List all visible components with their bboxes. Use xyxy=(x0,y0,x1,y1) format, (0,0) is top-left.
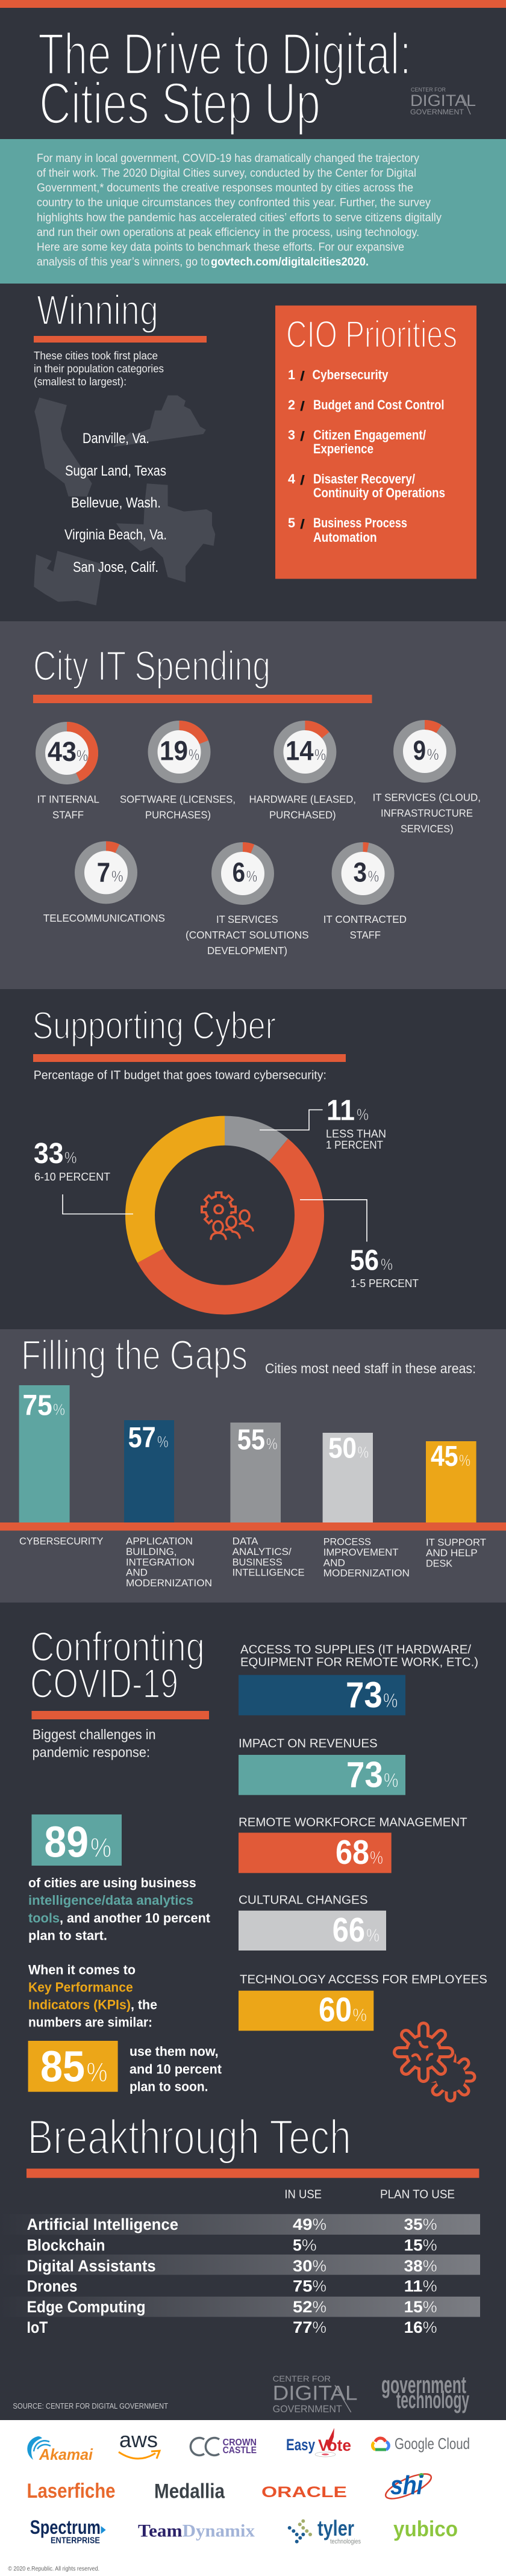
donut: 3 percent IT contracted staff: 3 xyxy=(353,857,367,887)
priorities list: Automation xyxy=(313,530,377,545)
logo: Tyler Technologies xyxy=(288,2516,361,2545)
donut: 3 percent IT contracted staff: IT CONTRACTED xyxy=(323,913,407,925)
label: 11 percent: LESS THAN xyxy=(326,1128,386,1140)
logo: Spectrum Enterprise: Spectrum xyxy=(30,2516,101,2538)
heading: Filling the Gaps: Filling the Gaps xyxy=(21,1332,248,1379)
donut: 9 percent IT services cloud: % xyxy=(427,745,439,763)
logo: Crown Castle xyxy=(190,2438,257,2456)
bar: process improvement 50 percent: AND xyxy=(323,1557,345,1568)
bar: process improvement 50 percent: IMPROVEMENT xyxy=(323,1547,399,1558)
intro paragraph: highlights how the pandemic has accelerated cities’ efforts to serve citizens digitally xyxy=(37,211,442,224)
label: 33 percent xyxy=(34,1138,110,1183)
bar: cybersecurity 75 percent: CYBERSECURITY xyxy=(19,1536,103,1547)
bar: IT support 45 percent: DESK xyxy=(426,1557,453,1569)
logo: SHI: shi xyxy=(390,2471,423,2500)
winning cities list: San Jose, Calif. xyxy=(73,559,158,576)
bar: remote workforce management 68 percent: 68 xyxy=(336,1833,369,1872)
donut: 6 percent IT services contract: % xyxy=(246,867,257,885)
row: Artificial Intelligence: % xyxy=(312,2215,326,2233)
logo: Crown Castle: CASTLE xyxy=(223,2445,257,2456)
row: Digital Assistants xyxy=(0,2255,480,2275)
donut: 14 percent hardware: HARDWARE (LEASED, xyxy=(249,793,356,805)
bar: application building 57 percent: BUILDING, xyxy=(126,1546,177,1557)
bar: remote workforce management 68 percent: REMOTE WORKFORCE MANAGEMENT xyxy=(239,1816,467,1829)
winning cities list: Danville, Va. xyxy=(83,430,149,447)
icon: virus xyxy=(392,2021,470,2097)
logo: Laserfiche: Laserfiche xyxy=(27,2480,116,2503)
donut: 14 percent hardware xyxy=(249,725,356,821)
bar: application building 57 percent: % xyxy=(157,1433,169,1451)
row: Edge Computing: 52 xyxy=(293,2298,312,2316)
bar: cultural changes 66 percent: % xyxy=(366,1925,380,1946)
heading: Confronting COVID-19: Confronting xyxy=(30,1624,205,1670)
donut: 6 percent IT services contract xyxy=(186,847,309,957)
bar: process improvement 50 percent xyxy=(323,1433,410,1579)
row: Artificial Intelligence: 49 xyxy=(293,2215,312,2233)
winning intro text xyxy=(34,350,164,388)
label: 56 percent: 1-5 PERCENT xyxy=(351,1277,419,1290)
donut: 9 percent IT services cloud: INFRASTRUCTURE xyxy=(381,807,473,819)
bar: data analytics 55 percent: BUSINESS xyxy=(233,1556,283,1568)
title: Cities Step Up xyxy=(39,70,320,136)
priorities list: / xyxy=(300,368,305,383)
label: 33 percent: 6-10 PERCENT xyxy=(34,1171,110,1183)
logo: EasyVote xyxy=(286,2428,351,2457)
bar: process improvement 50 percent: MODERNIZATION xyxy=(323,1568,410,1579)
label: 56 percent xyxy=(350,1245,419,1290)
bar: IT support 45 percent xyxy=(426,1441,486,1569)
priorities list: 1 xyxy=(288,367,295,382)
row: Edge Computing: 15 xyxy=(404,2298,423,2316)
stat box: 85 percent xyxy=(28,2041,118,2092)
row: IoT: 77 xyxy=(293,2318,312,2336)
logo: EasyVote: Vote xyxy=(318,2436,351,2454)
row: Blockchain: % xyxy=(423,2236,437,2255)
bar: technology access 60 percent: TECHNOLOGY ACCESS FOR EMPLOYEES xyxy=(240,1973,487,1986)
bar: data analytics 55 percent xyxy=(230,1423,305,1578)
bar: data analytics 55 percent: DATA xyxy=(233,1536,258,1547)
logo: SHI xyxy=(383,2469,434,2504)
priorities list: Experience xyxy=(313,441,373,456)
donut: 7 percent telecommunications: TELECOMMUNICATIONS xyxy=(43,912,165,924)
bar: impact on revenues 73 percent: % xyxy=(384,1769,398,1791)
subheading: Cities most need staff in these areas: xyxy=(265,1361,476,1376)
stat box: 85 percent: 85 xyxy=(40,2043,85,2091)
intro paragraph: of their work. The 2020 Digital Cities survey, conducted by the Center for Digital xyxy=(37,167,416,179)
donut: 14 percent hardware: % xyxy=(314,746,326,764)
priorities list: / xyxy=(300,429,305,444)
bar: application building 57 percent: INTEGRATION xyxy=(126,1556,195,1568)
stat box: 89 percent xyxy=(31,1814,122,1866)
text: KPIs: Indicators (KPIs) xyxy=(28,1997,131,2012)
text: use them now: use them now, xyxy=(130,2044,219,2059)
intro paragraph: govtech.com/digitalcities2020. xyxy=(211,256,369,268)
bar: remote workforce management 68 percent xyxy=(239,1816,467,1873)
logo: Akamai: Akamai xyxy=(39,2445,93,2463)
donut: 43 percent IT internal staff: STAFF xyxy=(52,809,84,821)
bar: IT support 45 percent: % xyxy=(459,1451,470,1470)
winning intro text: (smallest to largest): xyxy=(34,376,126,388)
intro paragraph xyxy=(37,152,442,268)
donut: 9 percent IT services cloud: 9 xyxy=(413,735,426,766)
row: Artificial Intelligence: 35 xyxy=(404,2215,423,2233)
logo: TeamDynamix: Team xyxy=(138,2521,183,2541)
subheading: Percentage of IT budget that goes toward cybersecurity: xyxy=(34,1069,326,1082)
donut: 6 percent IT services contract: IT SERVICES xyxy=(216,913,278,925)
text: KPIs: , the xyxy=(131,1997,157,2012)
text: KPIs xyxy=(28,1962,157,2030)
text: business intelligence: , and another 10 percent xyxy=(60,1910,211,1925)
bar: data analytics 55 percent: 55 xyxy=(237,1424,265,1456)
logo: Tyler Technologies: tyler xyxy=(317,2516,354,2540)
bar: IT support 45 percent: IT SUPPORT xyxy=(426,1537,486,1548)
donut: 6 percent IT services contract: 6 xyxy=(233,857,245,887)
donut: 14 percent hardware: 14 xyxy=(286,736,314,766)
intro paragraph: analysis of this year’s winners, go to xyxy=(37,256,210,268)
stat box: 89 percent: 89 xyxy=(44,1818,89,1866)
donut: 3 percent IT contracted staff: % xyxy=(368,867,379,885)
logo: Center for Digital Government: CENTER FOR xyxy=(411,87,446,93)
row: Blockchain xyxy=(27,2236,437,2255)
priorities list: Disaster Recovery/ xyxy=(313,471,415,486)
logo: Center for Digital Government footer: CENTER FOR xyxy=(273,2374,331,2383)
bar: application building 57 percent: APPLICATION xyxy=(126,1536,193,1547)
donut: 6 percent IT services contract: DEVELOPMENT) xyxy=(207,945,287,957)
winning cities list: Bellevue, Wash. xyxy=(71,495,161,511)
subheading: Biggest challenges in xyxy=(33,1727,156,1742)
donut: 6 percent IT services contract: (CONTRACT SOLUTIONS xyxy=(186,929,309,941)
logo: Spectrum Enterprise: ENTERPRISE xyxy=(51,2536,100,2546)
row: Artificial Intelligence: Artificial Intelligence xyxy=(27,2215,178,2233)
panel: Confronting COVID-19 xyxy=(28,1624,487,2097)
bar: process improvement 50 percent: 50 xyxy=(328,1433,357,1465)
row: Drones: 11 xyxy=(404,2277,423,2295)
donut: 43 percent IT internal staff xyxy=(37,727,99,821)
bar: impact on revenues 73 percent: 73 xyxy=(346,1754,383,1795)
donut: 43 percent IT internal staff: IT INTERNAL xyxy=(37,793,99,805)
priorities list: / xyxy=(300,473,305,488)
bar: cybersecurity 75 percent xyxy=(19,1385,103,1547)
priorities list: Budget and Cost Control xyxy=(313,397,445,412)
stat box: 85 percent: % xyxy=(87,2057,107,2088)
row: Digital Assistants: 38 xyxy=(404,2257,423,2275)
row: IoT xyxy=(27,2318,437,2336)
winning intro text: in their population categories xyxy=(34,363,164,375)
donut: 19 percent software: % xyxy=(189,746,199,764)
heading: Winning: Winning xyxy=(37,287,158,334)
logo: Center for Digital Government: GOVERNMENT xyxy=(410,108,464,116)
row: Drones: % xyxy=(423,2277,437,2295)
row: Digital Assistants: 30 xyxy=(293,2257,312,2275)
priorities list: / xyxy=(300,517,305,532)
logo: Center for Digital Government xyxy=(410,87,476,116)
bar: cybersecurity 75 percent: 75 xyxy=(23,1390,52,1422)
bar: cultural changes 66 percent xyxy=(239,1894,386,1951)
priorities list: Cybersecurity xyxy=(312,367,389,382)
row: Edge Computing: Edge Computing xyxy=(27,2298,146,2316)
text: business intelligence: intelligence/data analytics xyxy=(28,1893,193,1908)
text: business intelligence xyxy=(28,1875,211,1943)
row: Edge Computing: % xyxy=(423,2298,437,2316)
stat box: 89 percent: % xyxy=(90,1832,111,1863)
row: Blockchain: 15 xyxy=(404,2236,423,2255)
panel: Supporting Cyber xyxy=(33,1004,419,1300)
row: Drones: % xyxy=(312,2277,326,2295)
bar: access to supplies 73 percent: 73 xyxy=(346,1675,383,1715)
source note: SOURCE: CENTER FOR DIGITAL GOVERNMENT xyxy=(13,2402,168,2410)
label: 33 percent: 33 xyxy=(34,1138,64,1170)
donut: 7 percent telecommunications: % xyxy=(111,867,123,885)
donut: 43 percent IT internal staff: % xyxy=(77,746,88,765)
bar: access to supplies 73 percent: EQUIPMENT FOR REMOTE WORK, ETC.) xyxy=(240,1656,478,1669)
logo: TeamDynamix: Dynamix xyxy=(183,2521,255,2541)
text: business intelligence: of cities are using business xyxy=(28,1875,196,1890)
bar: process improvement 50 percent: % xyxy=(358,1444,369,1462)
subheading xyxy=(33,1727,156,1760)
bar: application building 57 percent: MODERNIZATION xyxy=(126,1577,212,1589)
panel: Filling the Gaps xyxy=(0,1332,506,1589)
row: Digital Assistants: Digital Assistants xyxy=(27,2257,156,2275)
label: 56 percent: % xyxy=(381,1256,393,1274)
text: business intelligence: tools xyxy=(28,1910,60,1925)
text: KPIs: numbers are similar: xyxy=(28,2015,152,2030)
bar: cybersecurity 75 percent: % xyxy=(53,1401,65,1419)
title xyxy=(38,21,411,136)
heading: Supporting Cyber: Supporting Cyber xyxy=(33,1004,276,1047)
row: Digital Assistants: % xyxy=(312,2257,326,2275)
row: IoT: 16 xyxy=(404,2318,423,2336)
logo: Medallia: Medallia xyxy=(154,2480,225,2503)
text: KPIs: Key Performance xyxy=(28,1979,133,1994)
donut: 7 percent telecommunications xyxy=(43,846,165,924)
icon: gear and people xyxy=(201,1191,253,1239)
priorities list: 5 xyxy=(288,515,295,530)
row: Drones: Drones xyxy=(27,2277,77,2295)
heading: Breakthrough Tech: Breakthrough Tech xyxy=(28,2111,351,2165)
logo: government technology xyxy=(381,2372,469,2413)
bar: impact on revenues 73 percent xyxy=(239,1737,405,1795)
logo: Center for Digital Government footer: DIGITAL xyxy=(273,2382,358,2404)
logo: Center for Digital Government: DIGITAL xyxy=(410,92,476,110)
donut: 19 percent software: PURCHASES) xyxy=(145,809,211,821)
winning intro text: These cities took first place xyxy=(34,350,158,362)
label: 56 percent: 56 xyxy=(350,1245,379,1276)
donut: 9 percent IT services cloud: SERVICES) xyxy=(401,822,453,834)
intro paragraph: Government,* documents the creative responses mounted by cities across the xyxy=(37,182,413,194)
table header xyxy=(284,2188,455,2202)
bar: IT support 45 percent: AND HELP xyxy=(426,1547,478,1559)
donut: 19 percent software xyxy=(120,725,236,821)
logo: Spectrum Enterprise xyxy=(30,2516,106,2546)
priorities list xyxy=(288,367,445,545)
bar: remote workforce management 68 percent: % xyxy=(370,1847,383,1868)
logo: Center for Digital Government footer: GOVERNMENT xyxy=(273,2403,342,2415)
leader lines xyxy=(63,1110,367,1241)
logo: EasyVote: Easy xyxy=(286,2436,315,2454)
panel: CIO Priorities xyxy=(275,306,476,579)
bar: technology access 60 percent: 60 xyxy=(319,1991,352,2029)
bar: process improvement 50 percent: PROCESS xyxy=(323,1536,371,1548)
row: Edge Computing xyxy=(0,2297,480,2317)
row: Artificial Intelligence xyxy=(0,2214,480,2235)
bar: access to supplies 73 percent xyxy=(239,1643,478,1715)
logo: Google Cloud: Google Cloud xyxy=(395,2435,470,2453)
bar: impact on revenues 73 percent: IMPACT ON REVENUES xyxy=(239,1737,378,1751)
logo: Tyler Technologies: technologies xyxy=(330,2538,361,2545)
donut: 9 percent IT services cloud xyxy=(373,725,481,834)
bar: application building 57 percent: AND xyxy=(126,1567,148,1578)
row: IoT: IoT xyxy=(27,2318,48,2336)
donut: 9 percent IT services cloud: IT SERVICES (CLOUD, xyxy=(373,791,481,803)
logo: Yubico: yubico xyxy=(393,2516,458,2541)
bar: data analytics 55 percent: INTELLIGENCE xyxy=(233,1567,305,1578)
winning cities list: Virginia Beach, Va. xyxy=(64,527,167,543)
label: 11 percent: 11 xyxy=(326,1094,355,1126)
logo: Crown Castle: CROWN xyxy=(223,2438,257,2448)
text: use them now: plan to soon. xyxy=(130,2079,208,2094)
logo: Oracle: ORACLE xyxy=(261,2484,347,2501)
priorities list: Business Process xyxy=(313,515,407,530)
label: 33 percent: % xyxy=(64,1149,77,1167)
priorities list: / xyxy=(300,399,305,414)
text: use them now: and 10 percent xyxy=(130,2061,222,2076)
logo: TeamDynamix xyxy=(138,2521,255,2541)
priorities list: 2 xyxy=(288,397,295,412)
row: Drones: 75 xyxy=(293,2277,312,2295)
bar: data analytics 55 percent: % xyxy=(266,1435,278,1453)
bar: access to supplies 73 percent: ACCESS TO SUPPLIES (IT HARDWARE/ xyxy=(240,1643,471,1657)
heading: CIO Priorities: CIO Priorities xyxy=(286,314,457,356)
bar: access to supplies 73 percent: % xyxy=(383,1689,398,1712)
bar: technology access 60 percent: % xyxy=(352,2005,367,2026)
row: Blockchain: 5 xyxy=(293,2236,302,2255)
donut: 19 percent software: 19 xyxy=(160,736,188,766)
donut: 3 percent IT contracted staff xyxy=(323,847,407,941)
bar: technology access 60 percent xyxy=(239,1973,487,2031)
table header: IN USE xyxy=(284,2188,322,2202)
heading: Confronting COVID-19: COVID-19 xyxy=(30,1660,178,1707)
donut: 14 percent hardware: PURCHASED) xyxy=(269,809,336,821)
priorities list: Citizen Engagement/ xyxy=(313,427,426,442)
winning cities list xyxy=(64,430,167,576)
panel: Breakthrough Tech xyxy=(0,2111,480,2336)
row: Blockchain: % xyxy=(302,2236,317,2255)
row: Drones xyxy=(27,2277,437,2295)
priorities list: 3 xyxy=(288,427,295,442)
intro paragraph: For many in local government, COVID-19 has dramatically changed the trajectory xyxy=(37,152,419,165)
state silhouettes map xyxy=(34,396,215,606)
priorities list: 4 xyxy=(288,471,296,486)
donut: 43 percent IT internal staff: 43 xyxy=(48,736,77,767)
label: 11 percent: % xyxy=(357,1105,369,1123)
logo: aws: aws xyxy=(119,2427,158,2452)
row: Digital Assistants: % xyxy=(423,2257,437,2275)
text: use them now xyxy=(130,2044,222,2094)
intro paragraph: Here are some key data points to benchmark these efforts. For our expansive xyxy=(37,241,404,254)
intro paragraph: and run their own operations at peak efficiency in the process, using technology. xyxy=(37,226,419,239)
label: 11 percent xyxy=(326,1094,386,1151)
bar: application building 57 percent xyxy=(124,1420,212,1589)
donut: 7 percent telecommunications: 7 xyxy=(97,857,110,887)
bar: cultural changes 66 percent: 66 xyxy=(333,1911,365,1949)
bar: cultural changes 66 percent: CULTURAL CHANGES xyxy=(239,1894,368,1907)
heading: City IT Spending: City IT Spending xyxy=(33,642,270,689)
subheading: pandemic response: xyxy=(33,1745,150,1760)
donut: 19 percent software: SOFTWARE (LICENSES, xyxy=(120,793,236,805)
row: Blockchain: Blockchain xyxy=(27,2236,105,2255)
row: Artificial Intelligence: % xyxy=(423,2215,437,2233)
row: Edge Computing: % xyxy=(312,2298,326,2316)
logo: Google Cloud xyxy=(372,2435,470,2453)
logo: Center for Digital Government footer xyxy=(273,2374,358,2415)
text: business intelligence: plan to start. xyxy=(28,1928,107,1943)
copyright: © 2020 e.Republic. All rights reserved. xyxy=(8,2566,99,2572)
label: 11 percent: 1 PERCENT xyxy=(326,1139,383,1151)
bar: IT support 45 percent: 45 xyxy=(431,1441,458,1473)
heading: Confronting COVID-19 xyxy=(30,1624,205,1707)
donut: 3 percent IT contracted staff: STAFF xyxy=(350,929,381,941)
donut chart: cyber budget share xyxy=(140,1131,310,1300)
priorities list: Continuity of Operations xyxy=(313,485,445,500)
text: KPIs: When it comes to xyxy=(28,1962,136,1977)
panel: Winning xyxy=(34,287,215,606)
row: IoT: % xyxy=(312,2318,326,2336)
row: IoT: % xyxy=(423,2318,437,2336)
winning cities list: Sugar Land, Texas xyxy=(65,463,166,479)
intro paragraph: country to the unique circumstances they confronted this year. Further, the survey xyxy=(37,197,431,209)
logo: Akamai xyxy=(27,2436,93,2463)
bar: application building 57 percent: 57 xyxy=(128,1422,156,1454)
bar: data analytics 55 percent: ANALYTICS/ xyxy=(233,1546,292,1557)
panel: City IT Spending xyxy=(33,642,481,957)
table header: PLAN TO USE xyxy=(380,2188,455,2202)
